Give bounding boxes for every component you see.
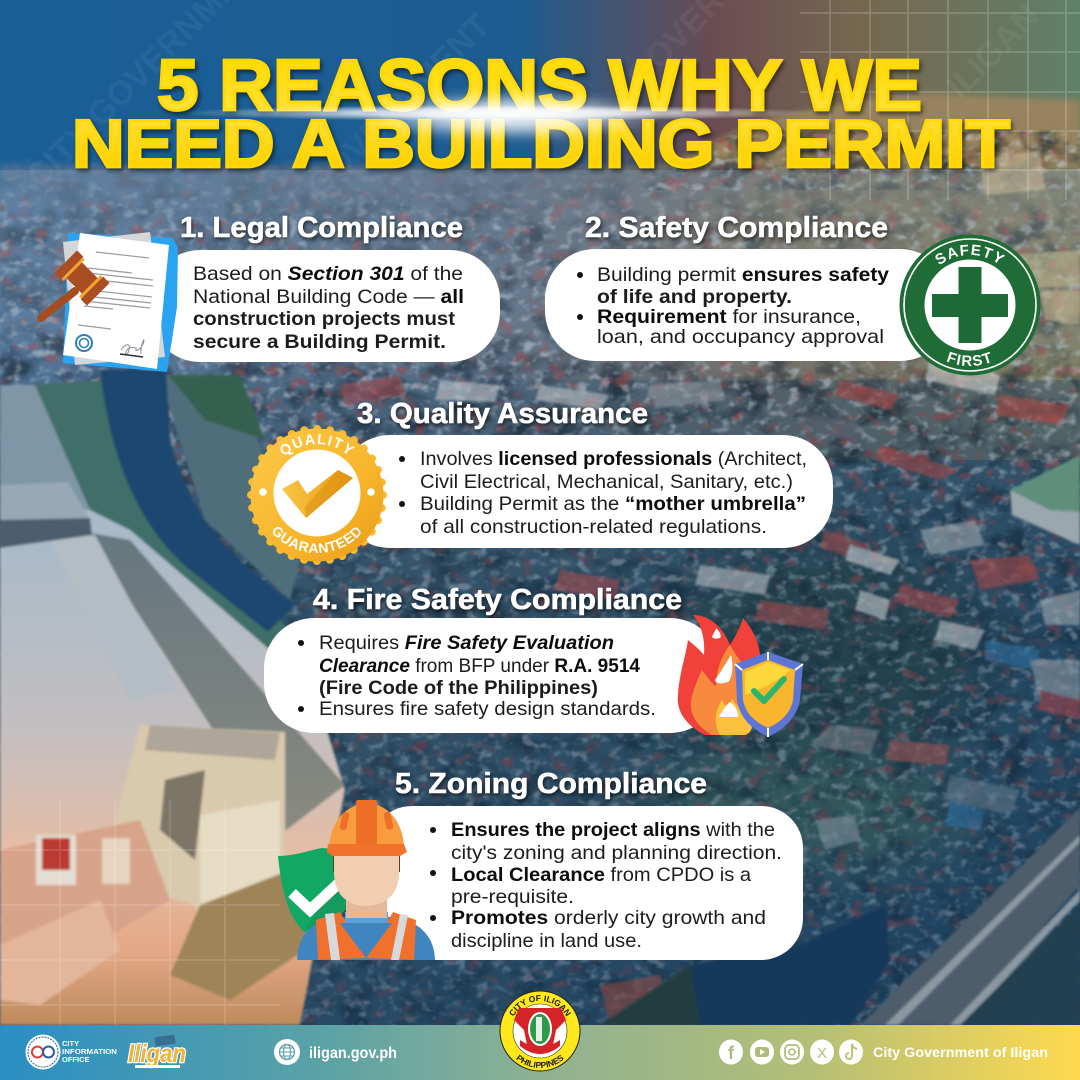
panel 1: legal compliance (41, 212, 500, 372)
social icons: X (817, 1045, 827, 1062)
text 1: National Building Code — all (193, 286, 464, 308)
title (72, 46, 1010, 182)
text 3 (399, 448, 807, 538)
logo: city information office: INFORMATION (62, 1047, 117, 1056)
text 5: Local Clearance from CPDO is a (451, 864, 751, 886)
social icons: f (728, 1043, 735, 1063)
left photo area (0, 370, 1080, 1025)
text 3: Civil Electrical, Mechanical, Sanitary, etc.) (420, 471, 793, 493)
rooftops (340, 150, 1080, 1025)
text 2: loan, and occupancy approval (597, 326, 884, 348)
text 1 (193, 263, 464, 353)
text 2: Requirement for insurance, (597, 306, 861, 328)
title glare (180, 92, 820, 140)
text 3: Involves licensed professionals (Architect, (420, 448, 807, 470)
heading 5: 5. Zoning Compliance (395, 768, 707, 800)
icon: safety first badge: FIRST (946, 352, 990, 366)
panel 4: fire safety compliance (264, 584, 803, 737)
text 4 (298, 632, 656, 720)
footer bar (0, 990, 1080, 1080)
card 4 (264, 618, 720, 733)
icon: safety first badge: SAFETY (935, 244, 1006, 264)
text 5: city's zoning and planning direction. (451, 842, 782, 864)
text 3: Building Permit as the “mother umbrella” (420, 493, 806, 515)
text 5: pre-requisite. (451, 886, 574, 908)
heading 3: 3. Quality Assurance (357, 398, 648, 430)
website (274, 1039, 397, 1065)
text 2: Building permit ensures safety (597, 264, 889, 286)
text 4: Clearance from BFP under R.A. 9514 (319, 655, 640, 677)
text 5: Ensures the project aligns with the (451, 819, 775, 841)
title: 5 REASONS WHY WE (157, 46, 922, 126)
icon: quality guaranteed badge (247, 425, 387, 565)
icon: quality guaranteed badge: GUARANTEED (272, 526, 360, 554)
logo: city information office: OFFICE (62, 1055, 90, 1064)
seal of the city of iligan (500, 990, 580, 1072)
card 2 (545, 249, 950, 361)
logo: city information office (26, 1034, 117, 1070)
text 4: (Fire Code of the Philippines) (319, 677, 598, 699)
watermark: GOVERNMENT (299, 6, 498, 206)
text 5: Promotes orderly city growth and (451, 907, 766, 929)
panel 2: safety compliance (545, 212, 1040, 376)
icon: flame and shield (678, 615, 803, 737)
icon: worker with shield (278, 800, 435, 960)
logo: city information office: CITY (62, 1039, 79, 1048)
text 4: Ensures fire safety design standards. (319, 698, 656, 720)
panel 3: quality assurance (247, 398, 833, 565)
logo: first iligan: Iligan (128, 1040, 186, 1068)
icon: safety first badge (900, 234, 1040, 376)
title: NEED A BUILDING PERMIT (72, 106, 1010, 182)
social icons (719, 1040, 863, 1064)
website: iligan.gov.ph (309, 1045, 397, 1062)
text 1: secure a Building Permit. (193, 331, 446, 353)
text 5 (430, 819, 782, 952)
text 1: construction projects must (193, 308, 456, 330)
heading 2: 2. Safety Compliance (585, 212, 888, 244)
watermark: ILIGAN (939, 0, 1047, 106)
text 2: of life and property. (597, 286, 792, 308)
facebook page name: City Government of Iligan (873, 1045, 1048, 1060)
text 3: of all construction-related regulations. (420, 516, 767, 538)
panel 5: zoning compliance (278, 768, 803, 960)
heading 4: 4. Fire Safety Compliance (313, 584, 682, 616)
text 2 (577, 264, 889, 348)
card 5 (370, 806, 803, 960)
icon: quality guaranteed badge: QUALITY (280, 434, 355, 455)
icon: documents and gavel (41, 232, 178, 372)
heading 1: 1. Legal Compliance (180, 212, 463, 244)
card 1 (150, 250, 500, 362)
card 3 (340, 435, 833, 548)
watermark (19, 0, 1047, 206)
text 4: Requires Fire Safety Evaluation (319, 632, 614, 654)
seal of the city of iligan: PHILIPPINES (516, 1054, 564, 1068)
text 5: discipline in land use. (451, 930, 642, 952)
seal of the city of iligan: CITY OF ILIGAN (510, 995, 571, 1016)
text 1: Based on Section 301 of the (193, 263, 463, 285)
